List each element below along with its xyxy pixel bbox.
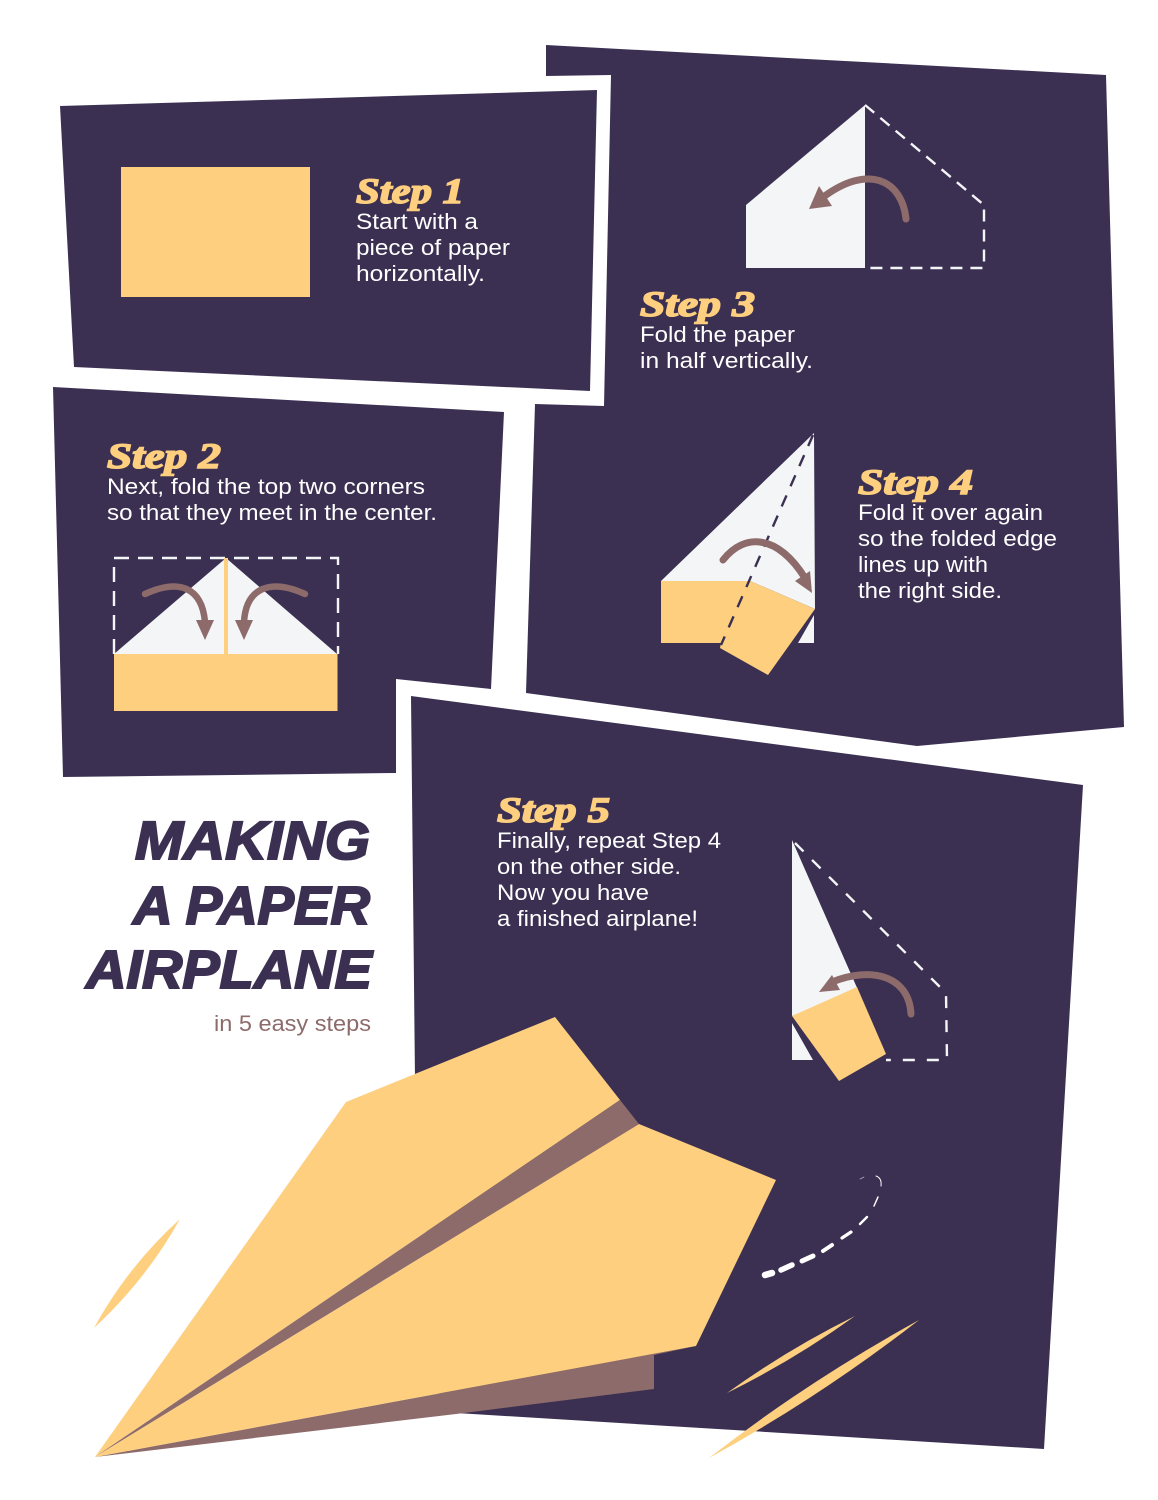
title: AIRPLANE [84,940,374,1000]
panel: step 2 [53,387,504,777]
step 4 text [858,462,1057,603]
subtitle: in 5 easy steps [214,1011,371,1036]
panel: step 1 [60,90,597,391]
step 1 text [356,171,510,286]
icon: flight trail [765,1176,881,1275]
step 2 text: Step 2 [107,436,221,476]
step 4 text: so the folded edge [858,526,1057,551]
panel: step 5 [411,696,1083,1458]
step 5 text: Now you have [497,880,649,905]
title [84,811,374,1000]
step 3 text: Step 3 [640,284,755,324]
step 2 text: Next, fold the top two corners [107,474,425,499]
step 4 text: the right side. [858,578,1002,603]
step 2 text [107,436,437,525]
step 4 text: Step 4 [858,462,973,502]
icon: left speed line [94,1219,180,1328]
illustration: paper airplane [95,1017,776,1457]
step 3 text: Fold the paper [640,322,795,347]
step 1 text: Start with a [356,209,479,234]
step 5 text: on the other side. [497,854,681,879]
step 3 text [640,284,813,373]
step 1 text: Step 1 [356,171,464,211]
icon: step 3 half fold [746,105,984,268]
step 1 text: piece of paper [356,235,510,260]
step 4 text: Fold it over again [858,500,1043,525]
icon: right speed lines [709,1316,919,1458]
step 4 text: lines up with [858,552,988,577]
step 5 text: Finally, repeat Step 4 [497,828,721,853]
step 5 text: Step 5 [497,790,610,830]
step 5 text: a finished airplane! [497,906,698,931]
icon: step 4 edge fold [661,433,815,675]
title: A PAPER [131,876,370,936]
step 3 text: in half vertically. [640,348,813,373]
step 2 text: so that they meet in the center. [107,500,437,525]
step 5 text [497,790,721,931]
panel: step 3 and step 4 [526,45,1124,746]
title: MAKING [135,811,370,871]
step 1 text: horizontally. [356,261,485,286]
icon: step 5 other side fold [792,840,947,1081]
icon: sheet of paper [121,167,310,297]
icon: step 2 corner fold [114,558,338,711]
